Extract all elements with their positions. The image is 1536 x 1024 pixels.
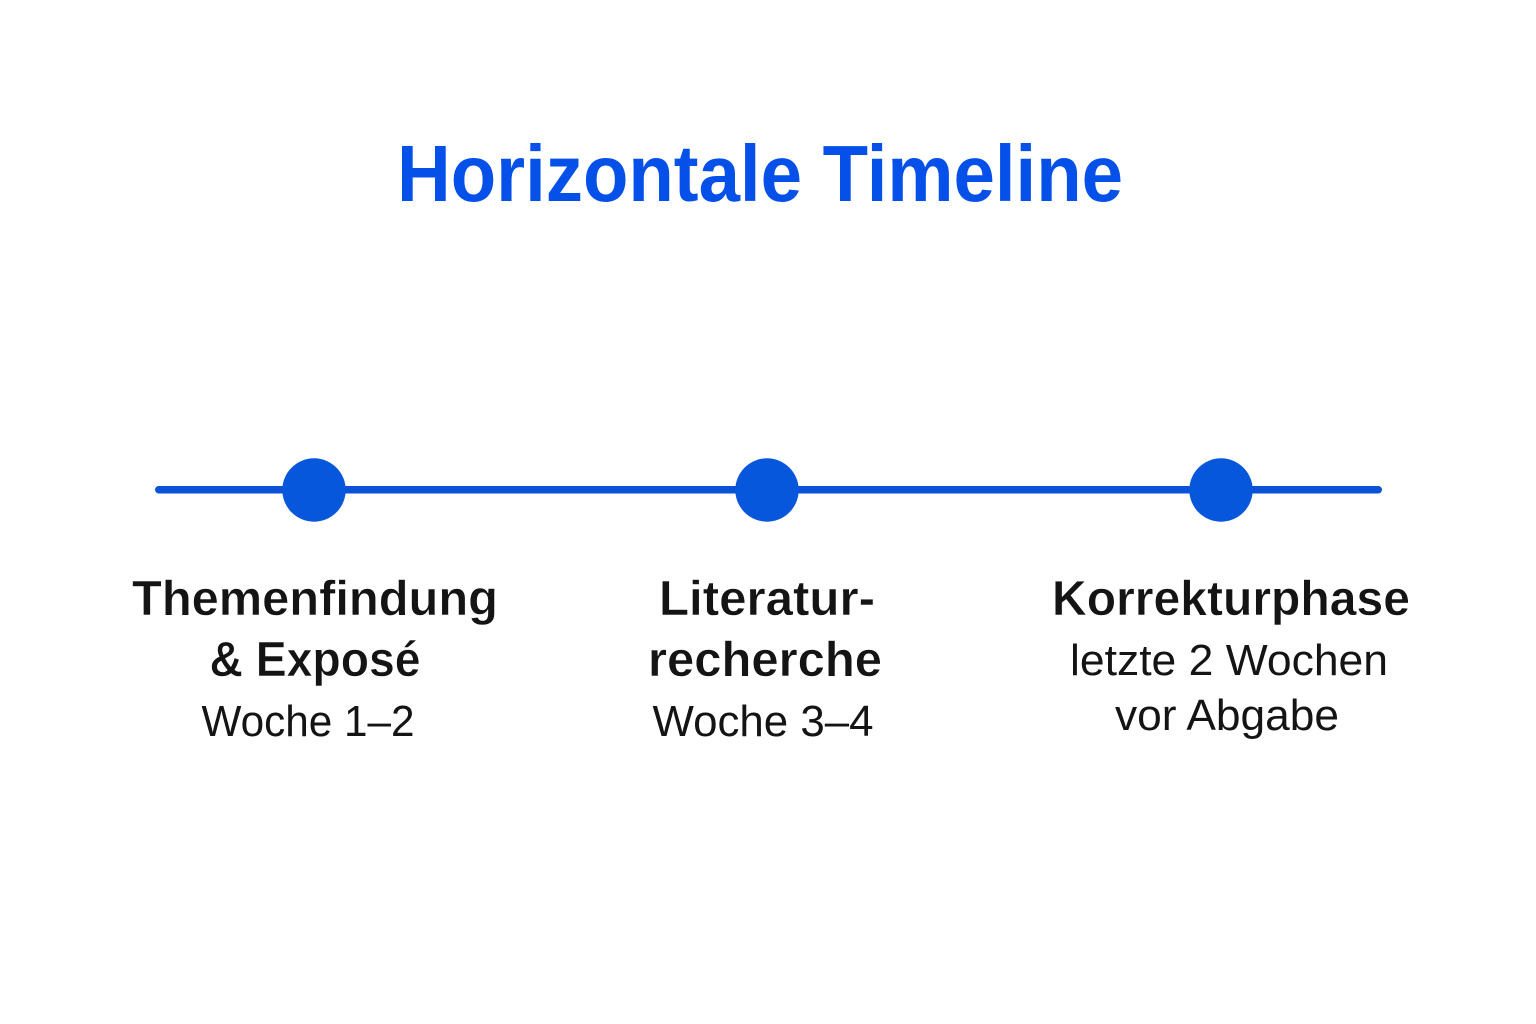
- marker 1: [282, 458, 346, 522]
- milestone 1 text: Woche 1–2: [202, 697, 414, 746]
- title: Horizontale Timeline: [397, 129, 1123, 218]
- milestone 3 text: Korrekturphase: [1052, 572, 1410, 626]
- marker 2: [735, 458, 799, 522]
- timeline line: [155, 486, 1382, 494]
- milestone 3 text: vor Abgabe: [1115, 691, 1339, 740]
- milestone 2 text: Literatur-: [659, 572, 875, 626]
- milestone 1 text: [132, 572, 498, 746]
- milestone 2 text: [648, 572, 882, 746]
- milestone 2 text: Woche 3–4: [652, 697, 874, 746]
- milestone 3 text: [1052, 572, 1410, 740]
- milestone 3 text: letzte 2 Wochen: [1070, 636, 1388, 685]
- milestone 1 text: & Exposé: [210, 633, 420, 687]
- milestone 2 text: recherche: [648, 633, 882, 687]
- milestone 1 text: Themenfindung: [132, 572, 498, 626]
- marker 3: [1189, 458, 1253, 522]
- timeline: [155, 458, 1382, 522]
